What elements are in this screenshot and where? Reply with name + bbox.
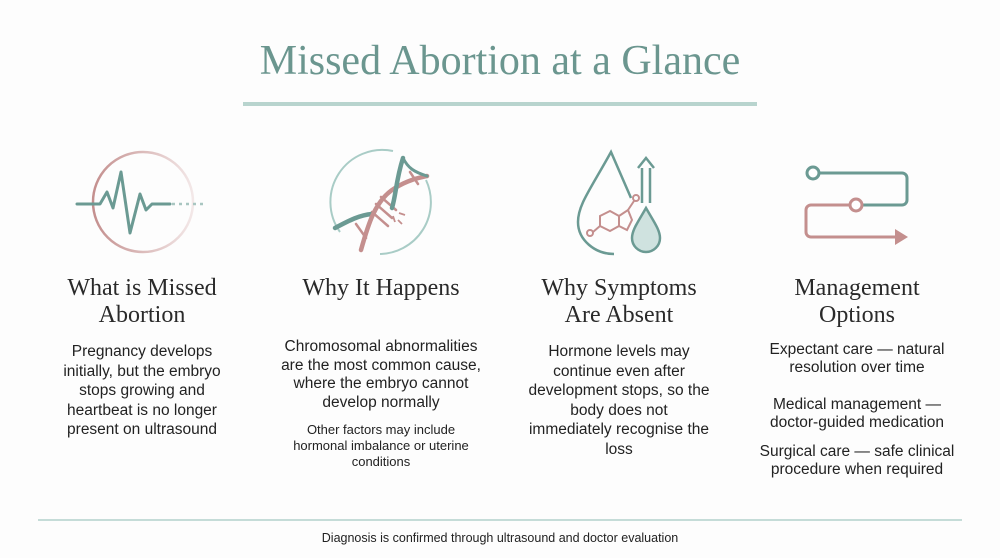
panel: management options: resolution over time: [789, 359, 925, 376]
panel: management options: procedure when required: [771, 461, 943, 478]
icon: DNA: [329, 148, 432, 255]
panel: why it happens: conditions: [352, 454, 410, 469]
title: Missed Abortion at a Glance: [260, 38, 740, 84]
footer note: Diagnosis is confirmed through ultrasound and doctor evaluation: [322, 531, 678, 545]
panel: why symptoms are absent: immediately recognise the: [529, 421, 709, 438]
panel: management options: doctor-guided medication: [770, 414, 944, 431]
panel: why symptoms are absent: development stops, so the: [529, 382, 709, 399]
panel: what is missed abortion: Abortion: [99, 302, 185, 328]
panel: why it happens: hormonal imbalance or uterine: [293, 438, 469, 453]
panel: management options: [760, 275, 954, 478]
panel: why it happens: develop normally: [322, 394, 440, 411]
panel: why symptoms are absent: [529, 275, 709, 458]
icon: hormone drops: [576, 149, 662, 256]
panel: why it happens: where the embryo cannot: [294, 375, 468, 392]
panel: what is missed abortion: heartbeat is no longer: [67, 402, 217, 419]
panel: why it happens: Chromosomal abnormalities: [285, 338, 477, 355]
panel: why symptoms are absent: continue even after: [553, 363, 685, 380]
panel: management options: Options: [819, 302, 895, 328]
footer divider: [38, 519, 962, 521]
panel: why symptoms are absent: Are Absent: [565, 302, 673, 328]
icon: management path: [804, 166, 908, 245]
panel: what is missed abortion: [63, 275, 221, 438]
panel: why symptoms are absent: Hormone levels may: [548, 343, 690, 360]
panel: management options: Expectant care — natural: [770, 341, 944, 358]
panel: what is missed abortion: present on ultrasound: [67, 421, 217, 438]
panel: why it happens: Other factors may include: [307, 422, 455, 437]
panel: what is missed abortion: stops growing and: [79, 382, 205, 399]
title underline: [243, 102, 757, 106]
panel: management options: Surgical care — safe clinical: [760, 443, 954, 460]
panel: what is missed abortion: What is Missed: [67, 275, 217, 301]
panel: why it happens: Why It Happens: [302, 275, 460, 301]
panel: management options: Management: [794, 275, 920, 301]
icon: heartbeat: [76, 150, 203, 254]
panel: why it happens: are the most common cause,: [281, 357, 481, 374]
panel: what is missed abortion: initially, but the embryo: [63, 363, 221, 380]
panel: management options: Medical management —: [773, 396, 941, 413]
panel: what is missed abortion: Pregnancy develops: [72, 343, 212, 360]
panel: why symptoms are absent: body does not: [570, 402, 668, 419]
panel: why symptoms are absent: Why Symptoms: [541, 275, 697, 301]
panel: why it happens: [281, 275, 481, 469]
panel: why symptoms are absent: loss: [605, 441, 633, 458]
